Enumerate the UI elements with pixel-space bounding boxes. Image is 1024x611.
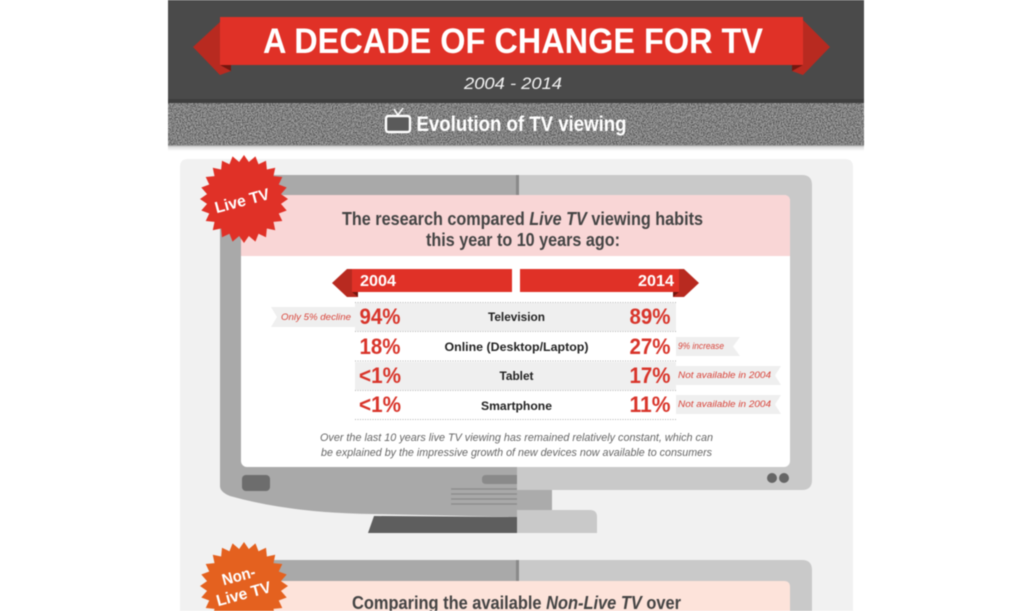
data table: [355, 302, 676, 420]
row: Online: Online (Desktop/Laptop): [444, 340, 588, 354]
row: Online: [360, 334, 670, 359]
row: Television: 94%: [360, 304, 400, 329]
panel background: [180, 159, 853, 611]
badge: Non-Live TV: Live TV: [215, 579, 273, 610]
screen heading: [241, 195, 790, 256]
panel: Non-Live TV: [220, 560, 812, 611]
callout: smartphone not available: [676, 395, 781, 414]
badge: Live TV: [200, 155, 288, 243]
panel: Live TV: [220, 175, 812, 533]
row: Television: [360, 304, 670, 329]
screen heading: this year to 10 years ago:: [426, 230, 620, 250]
row: Television: 89%: [630, 304, 670, 329]
callout: 9% increase: [676, 337, 740, 356]
callout: smartphone not available: Not available in 2004: [678, 399, 771, 409]
callout: 9% increase: 9% increase: [678, 341, 724, 351]
row: Online: 18%: [360, 334, 400, 359]
caption: be explained by the impressive growth of new devices now available to consumers: [321, 447, 712, 459]
year ribbon: 2004: [360, 273, 396, 290]
badge: Live TV: Live TV: [213, 186, 272, 217]
TV body: [220, 175, 812, 533]
badge: Non-Live TV: [200, 542, 288, 611]
callout: only 5% decline: Only 5% decline: [281, 312, 351, 322]
year ribbon: [332, 269, 699, 297]
date range: 2004 - 2014: [463, 74, 562, 93]
row: Tablet: [359, 363, 670, 388]
row: Smartphone: 11%: [630, 392, 670, 417]
title ribbon: [193, 17, 830, 75]
caption: [320, 432, 713, 459]
screen: [241, 195, 790, 467]
noise sub-header band: [168, 103, 864, 151]
title ribbon: A DECADE OF CHANGE FOR TV: [263, 22, 764, 61]
row: Online: 27%: [630, 334, 670, 359]
row: Smartphone: [359, 392, 670, 417]
row: Tablet: Tablet: [500, 369, 534, 383]
TV controls: [242, 475, 270, 491]
badge: Non-Live TV: Non-: [220, 564, 257, 589]
row: Smartphone: Smartphone: [481, 399, 552, 413]
year ribbon: 2014: [638, 273, 674, 290]
row: Smartphone: <1%: [359, 392, 401, 417]
icon: television: [386, 108, 410, 132]
row: Tablet: 17%: [630, 363, 670, 388]
screen heading: The research compared Live TV viewing habits: [342, 209, 703, 229]
section heading: Evolution of TV viewing: [416, 113, 626, 136]
TV stand: [368, 516, 517, 533]
callout: tablet not available: Not available in 2004: [678, 370, 771, 380]
callout: only 5% decline: [271, 307, 355, 327]
TV body: [220, 560, 812, 611]
row: Tablet: <1%: [359, 363, 401, 388]
screen heading: [241, 581, 790, 611]
callout: tablet not available: [676, 366, 781, 385]
caption: Over the last 10 years live TV viewing has remained relatively constant, which can: [320, 432, 713, 444]
header band: [168, 0, 864, 103]
row: Television: Television: [488, 310, 545, 324]
